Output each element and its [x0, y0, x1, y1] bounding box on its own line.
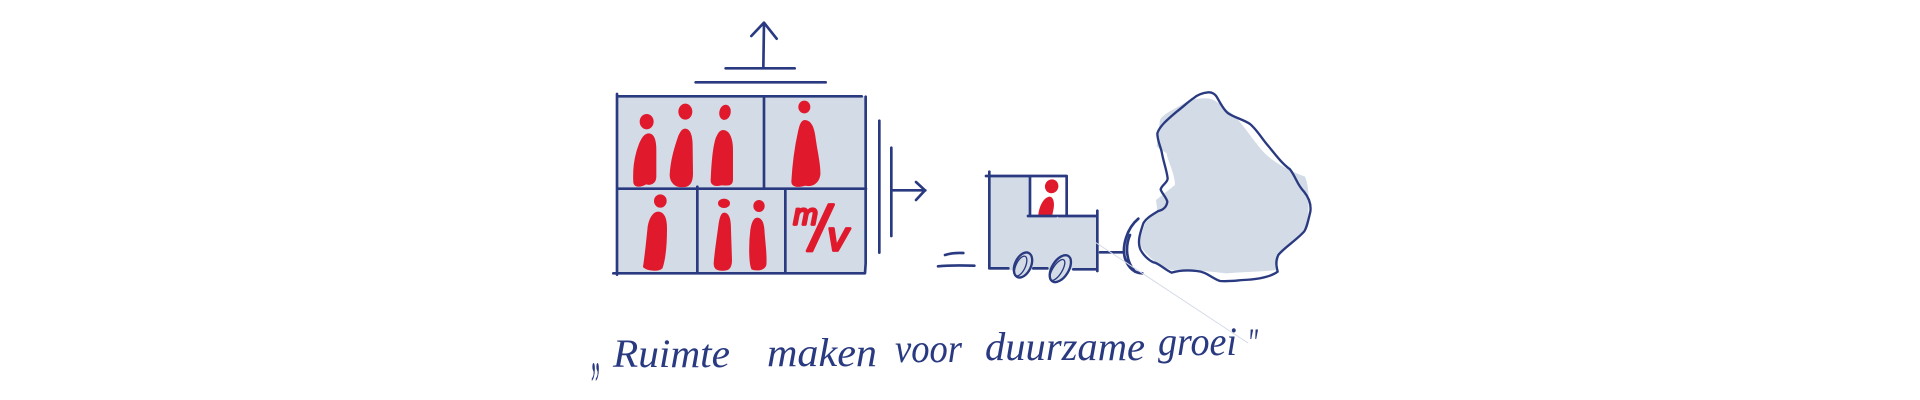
chart background: [617, 96, 865, 273]
pusher arm: [1100, 219, 1142, 273]
cab window: [1030, 177, 1067, 216]
arrow right with stacked lines: [879, 121, 925, 253]
word: maken: maken: [767, 330, 877, 375]
speed lines: [938, 253, 974, 266]
label m/v: v: [827, 213, 850, 260]
person 1: [634, 115, 655, 186]
word: groei: groei: [1158, 319, 1237, 364]
word: voor: voor: [895, 326, 962, 371]
vehicle body: [989, 176, 1097, 270]
person 5: [644, 195, 666, 270]
handwritten quote: „: [591, 309, 602, 386]
person 6: [715, 200, 731, 270]
label m/v: m: [793, 198, 818, 231]
vehicle outline: [986, 172, 1097, 271]
word: Ruimte: Ruimte: [612, 331, 730, 376]
label m/v: /: [807, 195, 835, 265]
faint pen trace line: [1057, 217, 1248, 343]
rock boulder: [1138, 92, 1311, 281]
boulder outline: [1139, 92, 1311, 281]
handwritten quote: [591, 309, 1258, 386]
person 2: [671, 105, 692, 186]
person 4: [792, 102, 819, 186]
driver: [1039, 178, 1059, 215]
person 7: [750, 201, 766, 269]
arrow up with stacked lines: [696, 23, 826, 82]
person 3: [712, 105, 732, 185]
organisation chart with people: [613, 94, 866, 275]
chart grid lines: [613, 94, 866, 275]
boulder fill: [1138, 98, 1309, 273]
wheels: [1010, 250, 1075, 286]
pushing vehicle with driver: [938, 172, 1142, 286]
closing quote: ": [1247, 320, 1258, 365]
word: duurzame: duurzame: [985, 324, 1145, 369]
